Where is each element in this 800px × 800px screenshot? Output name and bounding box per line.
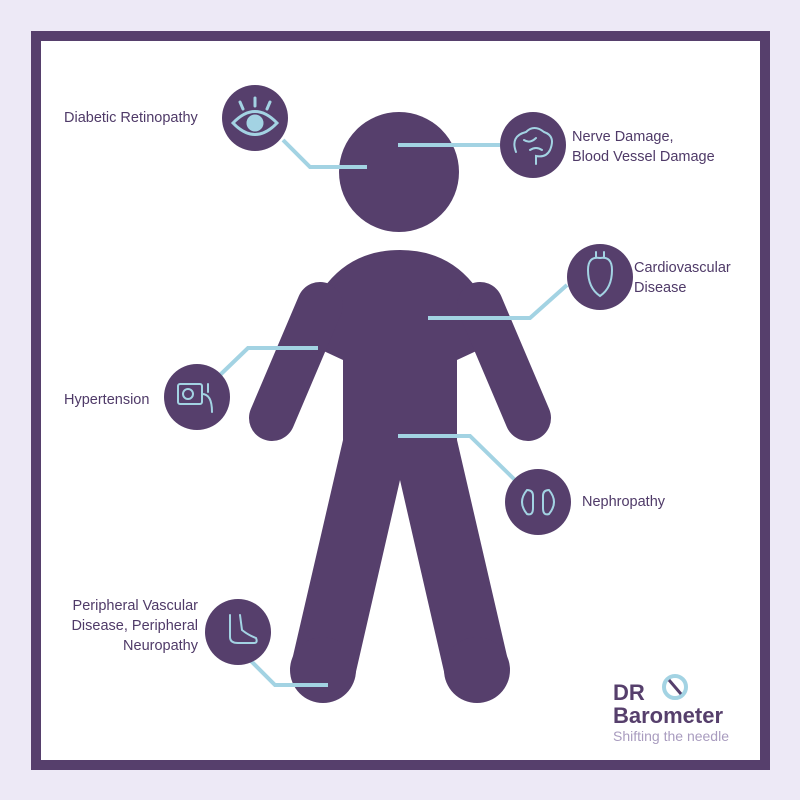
label: nerve damage: Nerve Damage, — [572, 129, 674, 145]
label: peripheral: Peripheral Vascular — [73, 598, 198, 614]
label: hypertension: Hypertension — [64, 392, 149, 408]
label: cardiovascular — [634, 260, 731, 296]
logo: DR — [613, 680, 645, 705]
icon circles — [164, 85, 633, 665]
icon glyphs — [178, 98, 612, 643]
label: cardiovascular: Disease — [634, 280, 686, 296]
label: nephropathy: Nephropathy — [582, 494, 665, 510]
label: nerve damage — [572, 129, 715, 165]
label: peripheral: Neuropathy — [123, 638, 198, 654]
human figure — [272, 112, 528, 703]
logo — [613, 674, 729, 744]
label: diabetic retinopathy: Diabetic Retinopathy — [64, 110, 198, 126]
label: nerve damage: Blood Vessel Damage — [572, 149, 715, 165]
label: peripheral: Disease, Peripheral — [71, 618, 198, 634]
label: peripheral — [71, 598, 198, 654]
connector lines — [220, 140, 567, 685]
logo: Barometer — [613, 703, 723, 728]
logo: Shifting the needle — [613, 728, 729, 744]
label: cardiovascular: Cardiovascular — [634, 260, 731, 276]
